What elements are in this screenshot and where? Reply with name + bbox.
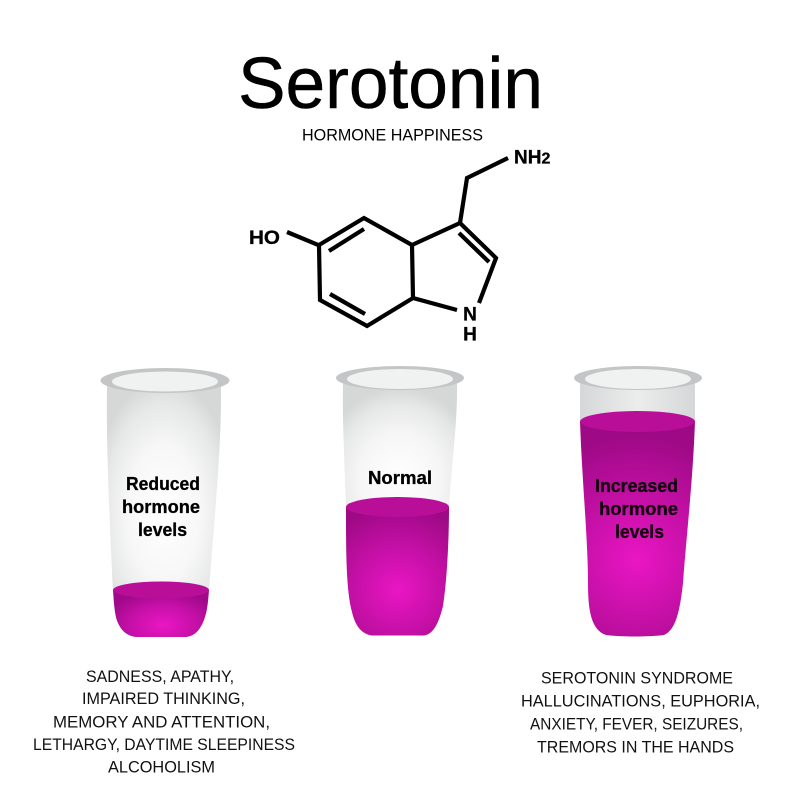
text block: increased level symptoms: SEROTONIN SYNDROME bbox=[541, 668, 733, 688]
text block: reduced level symptoms: MEMORY AND ATTENTION, bbox=[53, 712, 270, 732]
text block: reduced level symptoms: SADNESS, APATHY, bbox=[86, 667, 234, 686]
liquid bbox=[346, 507, 449, 636]
rim bbox=[574, 366, 702, 390]
text block: reduced level symptoms: LETHARGY, DAYTIME SLEEPINESS bbox=[33, 735, 295, 754]
glass body bbox=[580, 380, 695, 425]
text block: reduced level symptoms: IMPAIRED THINKING, bbox=[82, 689, 245, 708]
glass body bbox=[343, 382, 457, 510]
text block: reduced level symptoms bbox=[33, 667, 295, 776]
panel: increased hormone levels glass bbox=[574, 366, 702, 636]
text block: increased level symptoms: HALLUCINATIONS, EUPHORIA, bbox=[521, 692, 760, 710]
label: Increased bbox=[595, 476, 678, 496]
rim bbox=[100, 368, 230, 393]
label: Normal bbox=[368, 468, 432, 488]
label: NH ring nitrogen: N bbox=[463, 304, 477, 326]
text block: increased level symptoms bbox=[521, 668, 760, 756]
text block: increased level symptoms: TREMORS IN THE HANDS bbox=[537, 738, 734, 756]
rim bbox=[336, 366, 464, 390]
liquid surface bbox=[346, 497, 449, 517]
glass body bbox=[107, 384, 221, 592]
liquid surface bbox=[113, 582, 209, 598]
label bbox=[595, 476, 678, 542]
label: levels bbox=[138, 520, 187, 540]
liquid bbox=[113, 590, 209, 637]
liquid bbox=[580, 421, 695, 636]
chemical structure: serotonin molecule bbox=[249, 148, 550, 346]
text block: reduced level symptoms: ALCOHOLISM bbox=[108, 758, 215, 776]
liquid surface bbox=[580, 411, 695, 432]
label: HO: HO bbox=[249, 228, 280, 249]
molecule bonds bbox=[287, 158, 508, 326]
label: hormone bbox=[599, 499, 678, 519]
label: NH2: NH2 bbox=[514, 148, 550, 168]
label: Reduced bbox=[126, 474, 200, 494]
panel: reduced hormone levels glass bbox=[100, 368, 230, 637]
label: hormone bbox=[122, 497, 200, 517]
title: Serotonin bbox=[238, 44, 543, 124]
label: levels bbox=[615, 522, 664, 542]
label bbox=[122, 474, 200, 540]
subtitle: HORMONE HAPPINESS bbox=[302, 126, 483, 144]
panel: normal glass bbox=[336, 366, 464, 636]
label: H on ring nitrogen: H bbox=[463, 324, 477, 346]
text block: increased level symptoms: ANXIETY, FEVER, SEIZURES, bbox=[530, 714, 743, 734]
